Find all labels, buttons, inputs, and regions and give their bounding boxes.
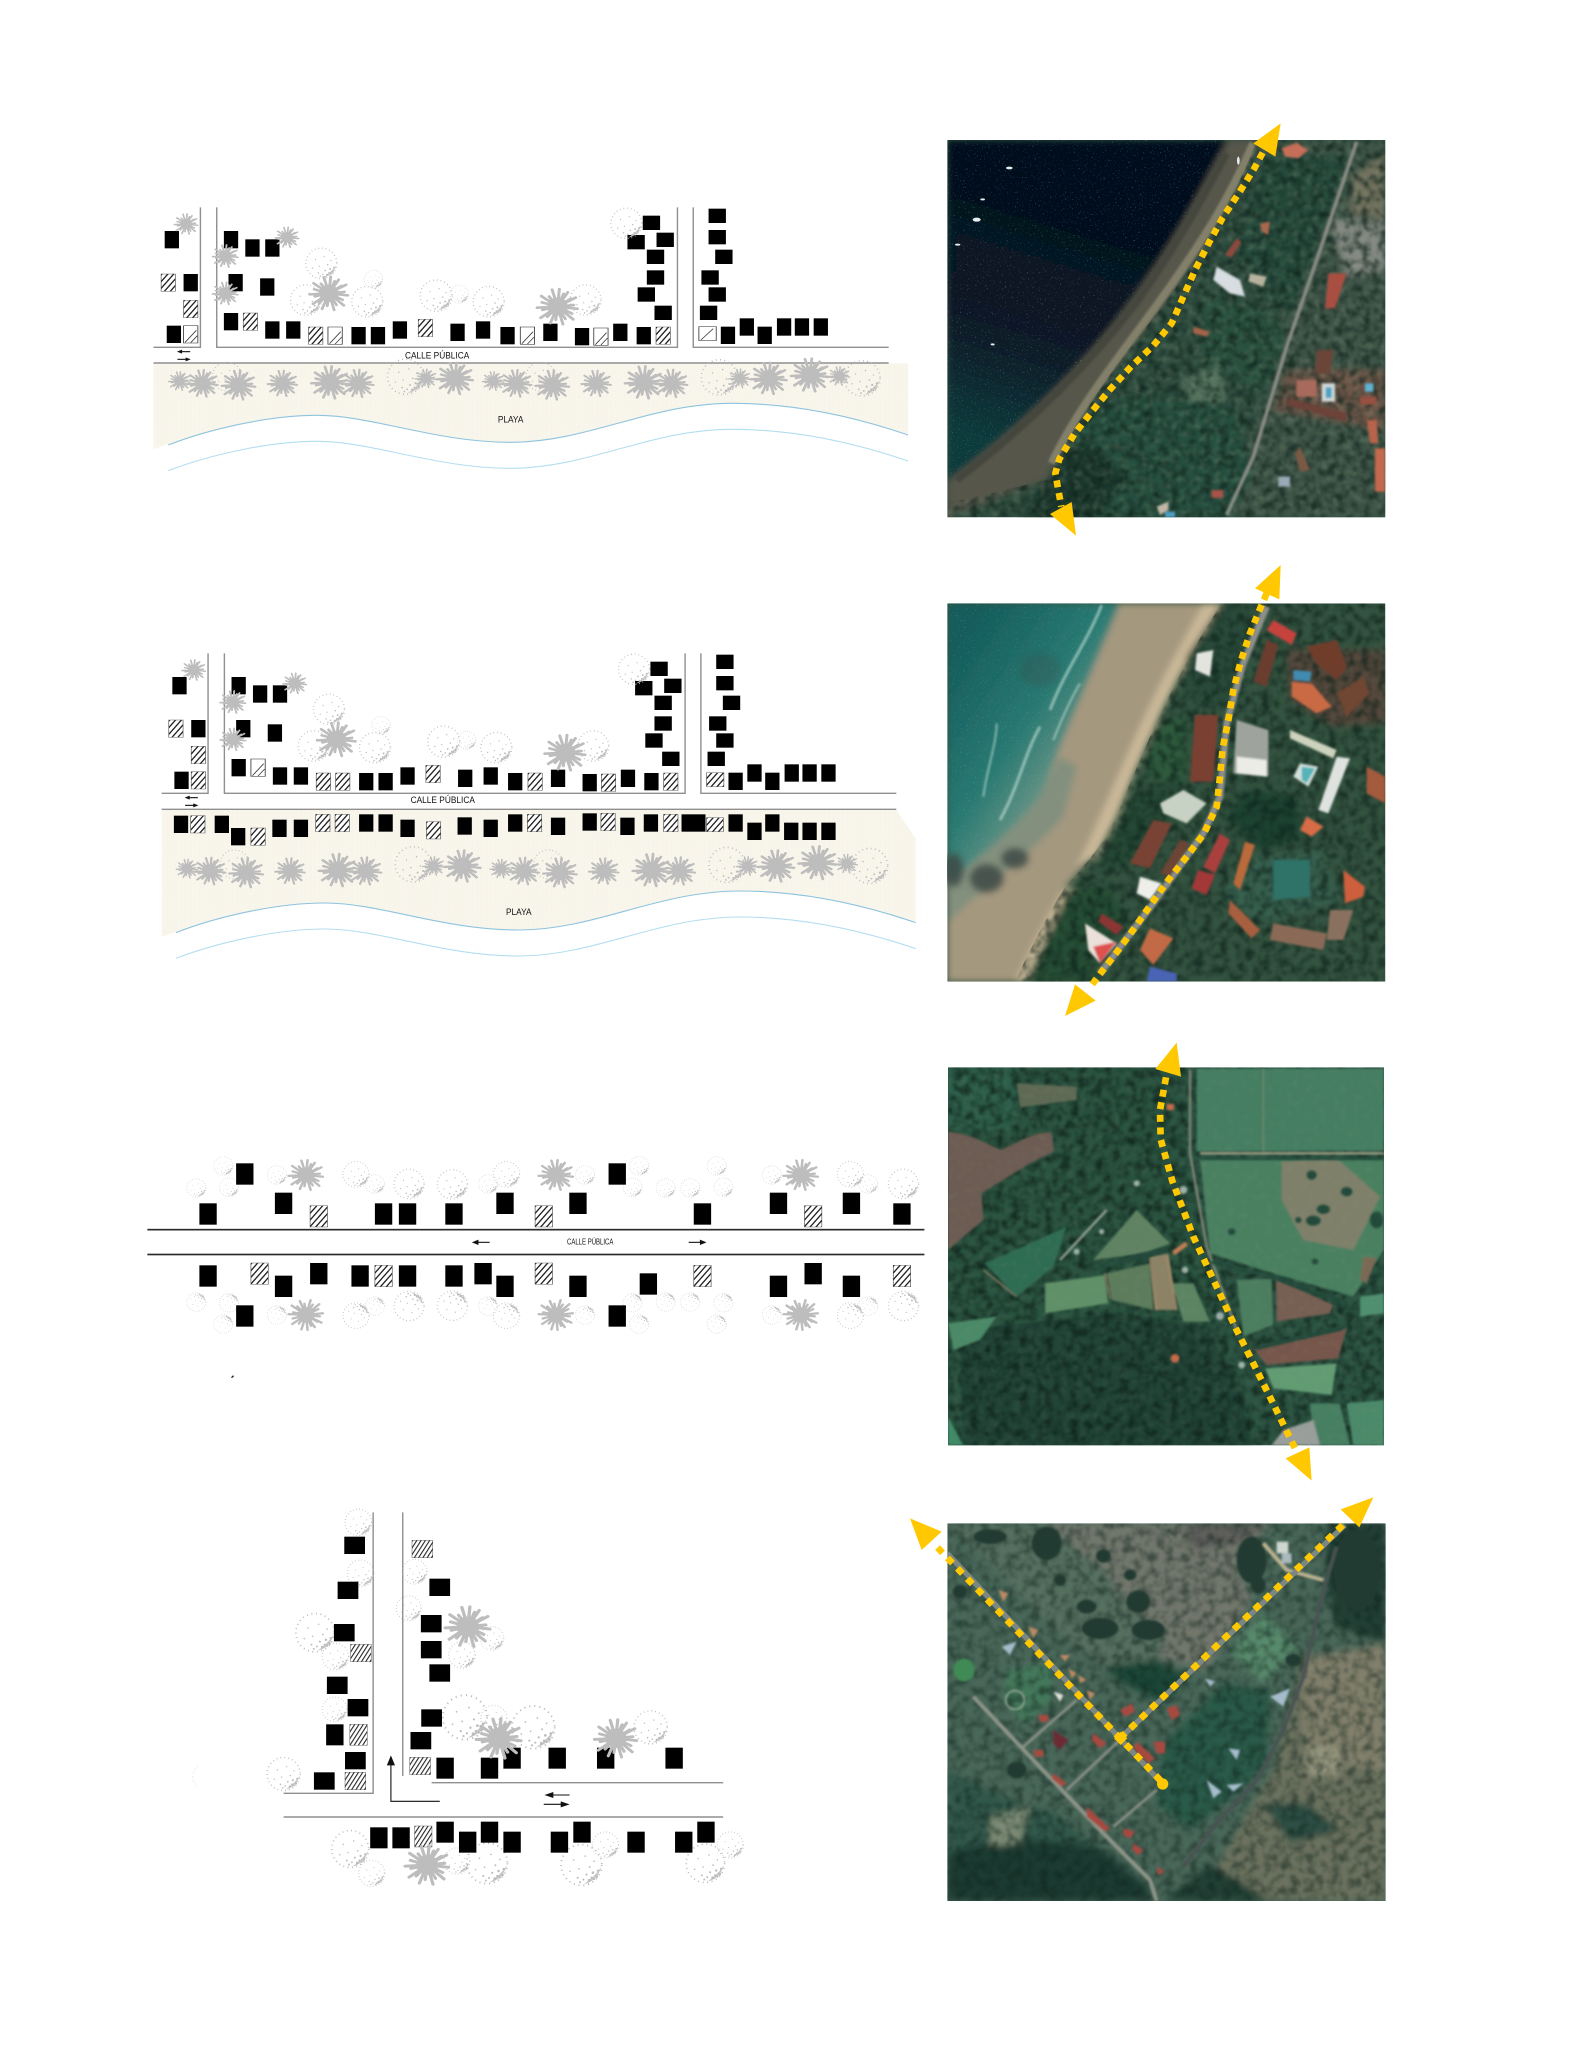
panel: beach street plan 2 (162, 653, 916, 958)
trees (176, 654, 888, 887)
water texture (948, 604, 1119, 866)
buildings south (199, 1263, 911, 1327)
label: playa: PLAYA (498, 414, 524, 425)
buildings (314, 1537, 715, 1853)
arrowhead north (1253, 123, 1281, 157)
beach sand (153, 363, 908, 449)
arrowhead north (1255, 565, 1281, 599)
two-way arrows (544, 1792, 570, 1807)
street lines (153, 207, 889, 363)
panel: satellite view 4 (910, 1497, 1386, 1901)
panel: inland street plan (147, 1157, 924, 1378)
beach mottling (957, 143, 1253, 480)
aerial photo (943, 603, 1385, 982)
tree texture (947, 1523, 1386, 1901)
street edges (147, 1229, 924, 1255)
aerial photo (948, 1067, 1384, 1445)
arrowhead south (1050, 502, 1076, 536)
palms (405, 1607, 637, 1884)
buildings (161, 209, 828, 345)
tree texture (1017, 604, 1386, 982)
forest texture (948, 1067, 1384, 1445)
panel: satellite view 2 (943, 565, 1385, 1016)
buildings north (199, 1163, 911, 1227)
route origin dot (1157, 1778, 1168, 1790)
street lines (162, 653, 896, 809)
fields (948, 1068, 1384, 1445)
shoreline waves (168, 403, 908, 471)
aerial photo (947, 1523, 1386, 1901)
two-way arrows (185, 796, 198, 807)
arrowhead north-west (910, 1518, 942, 1550)
arrowhead north-east (1341, 1497, 1373, 1527)
buildings north (169, 655, 836, 791)
arrowhead south (1065, 984, 1096, 1016)
route dashes west (937, 1547, 1161, 1781)
route dashes (1055, 153, 1263, 507)
panel: satellite view 3 (948, 1043, 1384, 1481)
tree texture and water specks (947, 140, 1385, 517)
arrowhead south (1286, 1447, 1312, 1481)
trees (187, 1157, 918, 1333)
panel: inland street plan: CALLE PÚBLICA (567, 1237, 613, 1247)
turn arrow (387, 1755, 440, 1801)
two-way arrows (177, 350, 191, 361)
buildings on beach side (174, 813, 836, 845)
dark tree clumps (953, 1527, 1380, 1778)
arrowhead north (1155, 1043, 1181, 1077)
route dashes (1160, 1077, 1297, 1452)
street lines (284, 1512, 723, 1817)
stray mark (232, 1376, 234, 1378)
aerial photo (947, 140, 1385, 517)
route dashes (1090, 593, 1267, 987)
junction marker (1114, 1732, 1127, 1745)
route dashes east (1120, 1521, 1347, 1738)
panel: satellite view 1 (947, 123, 1385, 536)
shoreline waves (176, 891, 916, 958)
direction arrows (472, 1240, 707, 1245)
trees (193, 1509, 743, 1886)
trees (169, 208, 880, 400)
label: calle pública: CALLE PÚBLICA (411, 794, 476, 805)
panel: corner street plan (193, 1509, 743, 1886)
label: playa: PLAYA (506, 906, 532, 917)
panel: beach street plan 1 (153, 207, 908, 471)
beach sand (162, 810, 916, 937)
label: calle pública: CALLE PÚBLICA (405, 349, 470, 361)
tree lines and village specks (1087, 1157, 1384, 1350)
